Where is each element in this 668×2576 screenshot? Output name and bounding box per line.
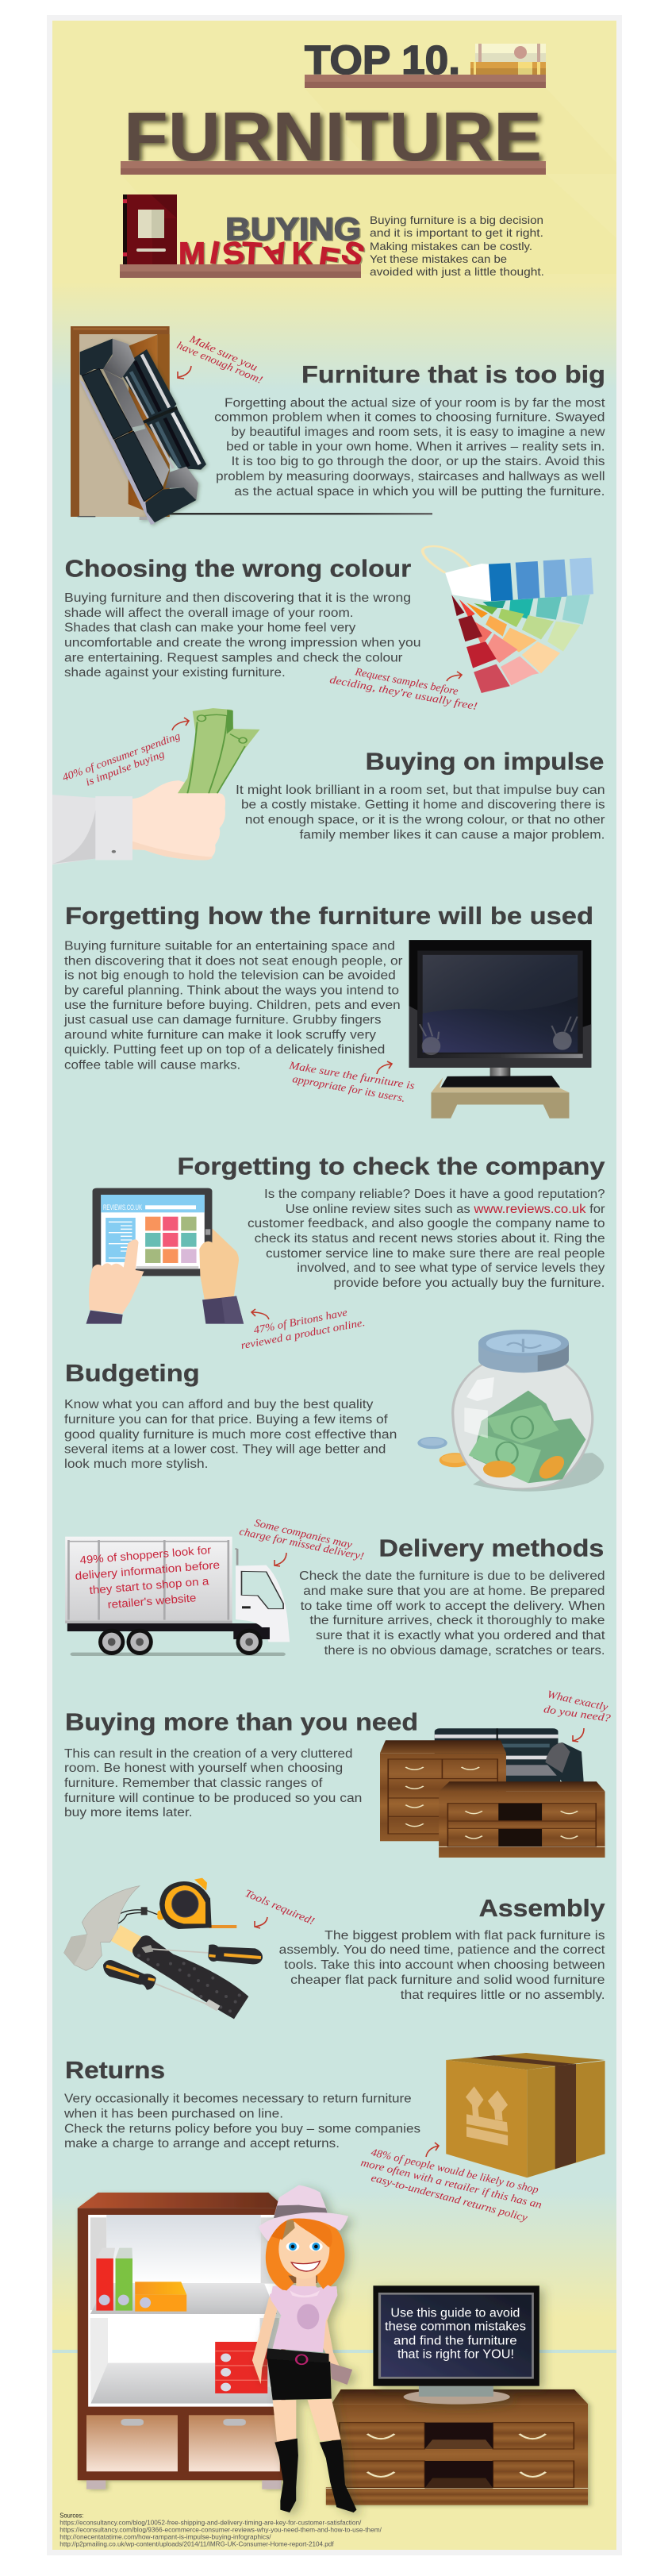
illustration: delivery truck <box>65 1537 290 1656</box>
body text: just casual use can damage furniture. Grubby fingers <box>63 1013 382 1026</box>
woman: head, hair and hat <box>259 2185 348 2329</box>
body text: cheaper flat pack furniture and solid wood furniture <box>290 1973 605 1987</box>
heading: broken mistakes letters: M <box>179 237 205 271</box>
panel: furniture that is too big <box>71 326 605 525</box>
body text: Shades that clash can make your home feel very <box>64 621 356 634</box>
body text: is not big enough to hold the television can be avoided <box>64 968 396 983</box>
body text: common problem when it comes to choosing furniture. Swayed <box>214 410 605 424</box>
body text <box>248 1188 605 1290</box>
body text: Buying furniture suitable for an entertaining space and <box>64 939 395 953</box>
heading: broken mistakes letters: I <box>207 235 222 271</box>
illustration: smiling woman in pink hat <box>252 2185 356 2512</box>
heading: broken mistakes letters: S <box>220 235 247 273</box>
heading: Buying on impulse <box>366 747 604 775</box>
arrow <box>255 1917 267 1928</box>
heading: broken mistakes letters: A <box>261 235 292 275</box>
stat on truck side <box>75 1543 221 1611</box>
callout: 40% of consumer spending <box>60 730 182 784</box>
illustration: colour swatch fan <box>423 546 593 693</box>
heading: Delivery methods <box>378 1534 604 1562</box>
callout: Make sure the furniture is <box>287 1059 416 1092</box>
callout: easy-to-understand returns policy <box>370 2171 528 2224</box>
body text: to take time off work to accept the delivery. When <box>301 1600 605 1613</box>
heading: Buying more than you need <box>65 1708 418 1735</box>
arrow <box>251 1309 269 1319</box>
body text <box>279 1929 605 2002</box>
message on tv screen: these common mistakes <box>385 2320 526 2334</box>
intro text <box>370 214 544 278</box>
heading: Forgetting how the furniture will be used <box>65 902 593 930</box>
body text: as the actual space in which you will be putting the furniture. <box>234 485 605 499</box>
heading: broken mistakes letters: K <box>292 237 313 271</box>
body text: It is too big to go through the door, or up the stairs. Avoid this <box>232 455 605 468</box>
callout: Some companies may <box>253 1516 353 1550</box>
sources: https://econsultancy.com/blog/10052-free-shipping-and-delivery-timing-are-key-for-customer-satisfaction/ <box>60 2519 362 2527</box>
stat on truck side: 49% of shoppers look for <box>79 1543 212 1566</box>
heading: broken mistakes letters <box>179 234 369 279</box>
body text: furniture you can for that price. Buying a few items of <box>64 1413 388 1427</box>
body text: Use online review sites such as www.reviews.co.uk for <box>286 1203 605 1216</box>
callout: Request samples before <box>353 665 459 697</box>
callout: is impulse buying <box>84 748 167 788</box>
body text <box>214 396 605 499</box>
message on tv screen: Use this guide to avoid <box>390 2306 520 2320</box>
callout: charge for missed delivery! <box>238 1525 365 1562</box>
illustration: tv with message <box>373 2285 539 2405</box>
callout: reviewed a product online. <box>240 1316 366 1351</box>
woman: body and boots <box>252 2285 356 2512</box>
panel: returns <box>63 2053 605 2224</box>
arrow <box>573 1728 584 1742</box>
sources: Sources: <box>60 2512 83 2520</box>
callout <box>359 2146 543 2224</box>
arrow <box>377 1061 392 1074</box>
body text <box>236 784 605 841</box>
body text <box>64 591 420 680</box>
body text: furniture. Remember that classic ranges of <box>64 1777 323 1790</box>
illustration: pile of furniture <box>380 1728 605 1858</box>
callout: Make sure you <box>187 333 259 373</box>
panel: buying on impulse <box>52 708 605 864</box>
intro text: Buying furniture is a big decision <box>370 214 543 226</box>
callout: What exactly <box>546 1688 609 1713</box>
intro text: Making mistakes can be costly. <box>370 240 532 252</box>
heading: furniture: FURNITURE <box>124 98 542 175</box>
shelf <box>305 75 546 88</box>
callout <box>287 1059 416 1104</box>
illustration: hammer, tape and screwdrivers <box>64 1878 263 2019</box>
body text: customer service line to make sure there are real people <box>266 1247 605 1261</box>
callout: 48% of people would be likely to shop <box>370 2146 540 2196</box>
body text: It might look brilliant in a room set, but that impulse buy can <box>236 784 605 797</box>
icon: stacked books <box>470 44 546 75</box>
body text: look much more stylish. <box>64 1457 208 1471</box>
heading: broken mistakes letters: E <box>317 241 342 279</box>
illustration: cardboard box <box>446 2053 605 2177</box>
heading: Returns <box>65 2056 165 2084</box>
panel: closing scene <box>78 2185 588 2512</box>
body text: furniture will continue to be produced so you can <box>64 1792 362 1805</box>
body text: Know what you can afford and buy the best quality <box>64 1398 374 1411</box>
callout <box>240 1306 366 1351</box>
body text: room. Be honest with yourself when choosing <box>64 1762 343 1775</box>
body text: by careful planning. Think about the ways you intend to <box>64 984 399 998</box>
message on tv screen: and find the furniture <box>394 2334 517 2347</box>
body text: buy more items later. <box>64 1806 193 1819</box>
panel: forgetting how the furniture will be used <box>63 902 593 1119</box>
body text: are entertaining. Request samples and check the colour <box>64 651 402 664</box>
illustration: tablet and hands <box>86 1188 244 1324</box>
body text: Check the date the furniture is due to be delivered <box>299 1569 605 1583</box>
message on tv screen: that is right for YOU! <box>397 2348 514 2362</box>
body text: Very occasionally it becomes necessary to return furniture <box>64 2093 412 2106</box>
body text: tools. Take this into account when choosing between <box>284 1958 605 1972</box>
body text: involved, and to see what type of service levels they <box>297 1261 605 1275</box>
callout: Tools required! <box>244 1887 317 1927</box>
stat on truck side: they start to shop on a <box>89 1574 209 1596</box>
sources: https://econsultancy.com/blog/9366-ecommerce-consumer-reviews-why-you-need-them-and-how-to-use-them/ <box>60 2526 382 2534</box>
title block <box>120 37 546 279</box>
body text: Is the company reliable? Does it have a good reputation? <box>264 1188 605 1201</box>
body text: by beautiful images and room sets, it is easy to imagine a new <box>232 425 605 439</box>
callout: 47% of Britons have <box>252 1306 348 1336</box>
body text: make a charge to arrange and accept returns. <box>64 2137 340 2151</box>
arrow <box>172 718 189 730</box>
illustration: tv cabinet <box>326 2389 588 2505</box>
body text: bed or table in your own home. When it arrives – reality sets in. <box>226 441 605 454</box>
panel: choosing the wrong colour <box>64 546 593 712</box>
illustration: sofa stuck in doorway <box>71 326 206 525</box>
panel: forgetting to check the company <box>86 1152 605 1351</box>
body text: family member likes it can cause a major problem. <box>300 828 605 841</box>
body text <box>299 1569 605 1658</box>
arrow <box>274 1553 286 1566</box>
body text <box>63 2093 420 2151</box>
callout: have enough room! <box>175 339 264 386</box>
body text: Check the returns policy before you buy – some companies <box>64 2123 420 2136</box>
heading: buying: BUYING <box>225 212 361 247</box>
panel: budgeting <box>64 1330 604 1492</box>
heading: broken mistakes letters: S <box>337 234 369 274</box>
body text: shade against your existing furniture. <box>64 666 286 680</box>
body text: good quality furniture is much more cost effective than <box>64 1428 397 1442</box>
body text: sure that it is exactly what you ordered and that <box>316 1629 605 1642</box>
icon: standing book <box>123 194 177 264</box>
illustration: money jar and coins <box>417 1330 604 1492</box>
heading: Assembly <box>479 1894 605 1922</box>
callout: more often with a retailer if this has an <box>359 2156 543 2211</box>
divider line <box>147 513 432 514</box>
intro text: avoided with just a little thought. <box>370 265 544 278</box>
heading: broken mistakes letters: T <box>241 236 263 272</box>
body text: that requires little or no assembly. <box>401 1989 605 2002</box>
intro text: and it is important to get it right. <box>370 226 543 239</box>
sources: http://onecentatatime.com/how-rampant-is-impulse-buying-infographics/ <box>60 2533 271 2541</box>
body text: there is no obvious damage, scratches or tears. <box>324 1644 605 1658</box>
body text: check its status and recent news stories about it. Ring the <box>255 1232 605 1246</box>
body text: Buying furniture and then discovering that it is the wrong <box>64 591 411 605</box>
panel: buying more than you need <box>64 1688 612 1858</box>
illustration: display cabinet with binders <box>78 2193 286 2489</box>
body text: be a costly mistake. Getting it home and discovering there is <box>241 798 605 811</box>
body text: customer feedback, and also google the company name to <box>248 1217 605 1230</box>
heading: Forgetting to check the company <box>177 1152 605 1180</box>
message on tv screen <box>385 2306 526 2362</box>
shelf <box>120 264 361 278</box>
illustration: hand holding cash <box>52 708 260 864</box>
body text: quickly. Putting feet up on top of a delicately finished <box>64 1043 385 1057</box>
body text: coffee table will cause marks. <box>64 1058 240 1072</box>
arrow <box>426 2143 439 2157</box>
sources <box>60 2512 382 2548</box>
illustration: tv with fingerprints <box>409 940 591 1119</box>
body text: not enough space, or it is the wrong colour, or that no other <box>245 813 605 827</box>
body text: uncomfortable and create the wrong impression when you <box>64 636 420 649</box>
body text: shade will affect the overall image of your room. <box>64 606 354 620</box>
callout <box>543 1688 612 1724</box>
label on tablet screen: REVIEWS.CO.UK <box>103 1203 142 1211</box>
body text: when it has been purchased on line. <box>63 2108 283 2121</box>
body text: The biggest problem with flat pack furniture is <box>324 1929 605 1943</box>
heading: Budgeting <box>65 1359 200 1387</box>
body text: several items at a lower cost. They will age better and <box>64 1442 386 1456</box>
callout: do you need? <box>543 1703 612 1724</box>
body text: the furniture arrives, check it thoroughly to make <box>309 1614 605 1627</box>
body text: problem by measuring doorways, staircases and hallways as well <box>216 470 605 483</box>
heading: top 10: TOP 10. <box>305 37 460 83</box>
body text <box>64 1747 362 1819</box>
body text: and make sure that you are at home. Be prepared <box>303 1584 605 1598</box>
panel: delivery methods <box>65 1516 605 1658</box>
body text <box>63 939 402 1072</box>
shelf <box>121 161 546 175</box>
body text <box>64 1398 397 1471</box>
callout <box>328 665 478 712</box>
callout: deciding, they're usually free! <box>328 673 478 712</box>
body text: use the furniture before buying. Children, pets and even <box>64 999 401 1012</box>
body text: then discovering that it does not seat enough people, or <box>64 954 402 968</box>
intro text: Yet these mistakes can be <box>370 252 507 265</box>
panel: assembly <box>64 1878 605 2019</box>
stat on truck side: delivery information before <box>75 1558 221 1582</box>
callout: appropriate for its users. <box>291 1072 406 1104</box>
arrow <box>178 366 191 379</box>
sources: http://p2pmailing.co.uk/wp-content/uploads/2014/11/IMRG-UK-Consumer-Home-report-2104.pdf <box>60 2540 334 2548</box>
body text: This can result in the creation of a very cluttered <box>64 1747 352 1761</box>
stat on truck side: retailer's website <box>107 1591 197 1611</box>
body text: around white furniture can make it look scruffy very <box>64 1029 376 1042</box>
heading: Choosing the wrong colour <box>65 555 411 583</box>
body text: assembly. You do need time, patience and the correct <box>279 1943 605 1957</box>
heading: Furniture that is too big <box>301 360 605 388</box>
arrow <box>447 672 462 681</box>
body text: provide before you actually buy the furniture. <box>333 1276 605 1290</box>
body text: Forgetting about the actual size of your room is by far the most <box>225 396 605 410</box>
